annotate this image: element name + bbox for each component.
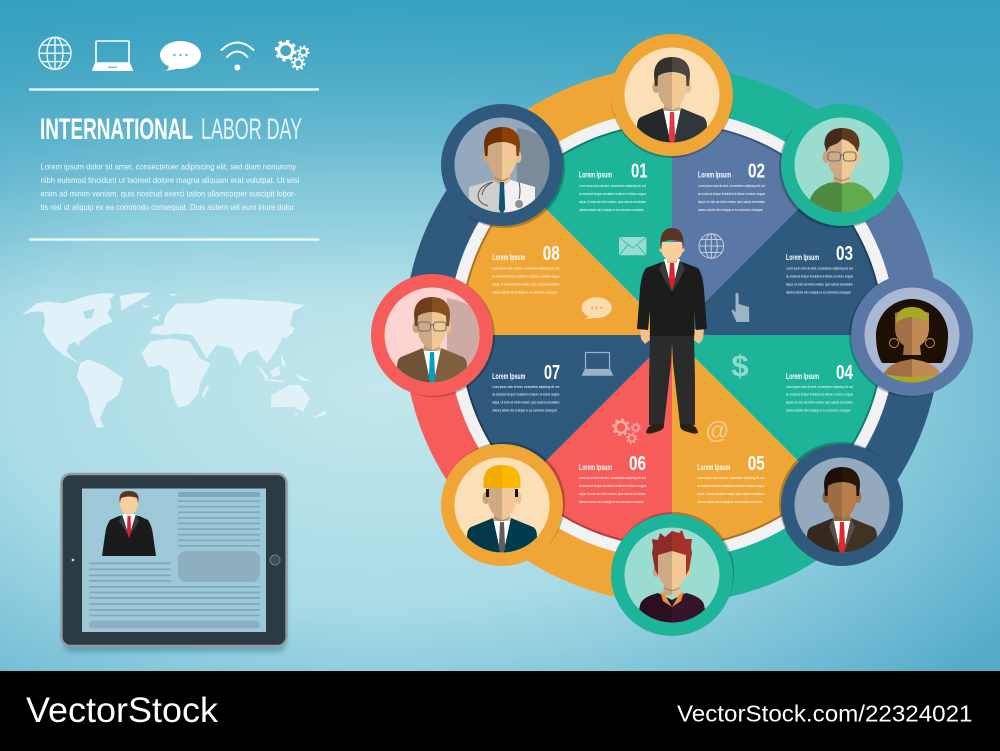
- text block 07: Lorem Ipsum: [492, 371, 526, 381]
- text block 01: ullamco laboris nisi ut aliquip ex ea commodo consequat.: [579, 208, 644, 212]
- text block 04: Lorem ipsum dolor sit amet, consectetuer adipiscing elit, sed: [786, 385, 853, 389]
- trousers: [649, 336, 695, 425]
- footer brand: VectorStock: [26, 691, 219, 730]
- jacket: [637, 262, 707, 336]
- wedge 01: [522, 123, 672, 335]
- wheel: [404, 67, 940, 603]
- pie wedges: [460, 123, 884, 547]
- icon: globe: [39, 37, 71, 69]
- shirt and tie: [659, 259, 685, 291]
- text block 01: do eiusmod tempor incididunt ut labore et dolore magna: [579, 192, 647, 196]
- avatar: construction worker: [441, 442, 565, 566]
- icon: chat bubble: [582, 297, 612, 319]
- text block 02: 02: [748, 161, 765, 183]
- avatar: woman with afro: [849, 274, 973, 397]
- text block 01: aliqua. Ut enim ad minim veniam, quis nostrud exercitation: [579, 200, 646, 204]
- text block 06: ullamco laboris nisi ut aliquip ex ea commodo consequat.: [579, 500, 644, 504]
- header icon row: [39, 37, 308, 71]
- text block 04: [786, 362, 854, 413]
- wedge 05: [672, 335, 822, 547]
- text block 07: Lorem ipsum dolor sit amet, consectetuer adipiscing elit, sed: [492, 385, 559, 389]
- text block 08: aliqua. Ut enim ad minim veniam, quis nostrud exercitation: [492, 282, 559, 286]
- white ring: [448, 111, 896, 559]
- intro paragraph: Lorem ipsum dolor sit amet, consectetuer adipiscing elit, sed diam nonummy: [40, 162, 297, 172]
- tablet person: [102, 491, 156, 556]
- intro paragraph: enim ad minim veniam, quis nostrud exerci tation ullamcorper suscipit lobor-: [40, 190, 296, 198]
- title: INTERNATIONAL: [40, 113, 193, 146]
- text block 06: Lorem ipsum dolor sit amet, consectetuer adipiscing elit, sed: [579, 476, 646, 480]
- text block 07: 07: [544, 362, 560, 384]
- intro paragraph: [40, 162, 300, 212]
- wedge 06: [522, 335, 672, 547]
- text block 07: do eiusmod tempor incididunt ut labore et dolore magna: [492, 393, 560, 397]
- icon: gears: [276, 41, 308, 69]
- text block 07: ullamco laboris nisi ut aliquip ex ea commodo consequat.: [492, 409, 557, 413]
- avatar: man with glasses and brown suit: [371, 274, 495, 397]
- text block 05: aliqua. Ut enim ad minim veniam, quis nostrud exercitation: [697, 492, 764, 496]
- text block 02: Lorem ipsum dolor sit amet, consectetuer adipiscing elit, sed: [698, 184, 765, 188]
- avatar: doctor: [441, 104, 565, 228]
- intro paragraph: tis nisl ut aliquip ex ea commodo consequat. Duis autem vel eum iriure dolor: [40, 203, 294, 212]
- text block 06: aliqua. Ut enim ad minim veniam, quis nostrud exercitation: [579, 492, 646, 496]
- text block 05: Lorem ipsum dolor sit amet, consectetuer adipiscing elit, sed: [697, 476, 764, 480]
- avatar: glasses man in green: [779, 104, 903, 228]
- text block 06: do eiusmod tempor incididunt ut labore et dolore magna: [579, 484, 647, 488]
- text block 03: ullamco laboris nisi ut aliquip ex ea commodo consequat.: [786, 290, 851, 294]
- text block 05: [697, 453, 765, 504]
- text block 02: [698, 161, 766, 212]
- icon: laptop: [92, 41, 133, 71]
- text block 05: do eiusmod tempor incididunt ut labore et dolore magna: [697, 484, 765, 488]
- text block 01: 01: [631, 161, 648, 183]
- text block 04: aliqua. Ut enim ad minim veniam, quis nostrud exercitation: [786, 401, 853, 405]
- text block 08: Lorem ipsum dolor sit amet, consectetuer adipiscing elit, sed: [492, 266, 559, 270]
- intro paragraph: nibh euismod tincidunt ut laoreet dolore magna aliquam erat volutpat. Ut wisi: [40, 176, 300, 185]
- text block 06: 06: [629, 453, 646, 475]
- text block 03: do eiusmod tempor incididunt ut labore et dolore magna: [786, 274, 854, 278]
- text block 01: Lorem ipsum dolor sit amet, consectetuer adipiscing elit, sed: [579, 184, 646, 188]
- icon: dollar: $: [731, 348, 749, 383]
- text block 03: 03: [836, 243, 853, 265]
- footer url: VectorStock.com/22324021: [677, 701, 972, 727]
- text block 02: Lorem Ipsum: [698, 170, 731, 180]
- text block 01: [579, 161, 648, 212]
- text block 07: [492, 362, 560, 413]
- shoes: [646, 424, 698, 434]
- icon: at sign: @: [705, 418, 729, 444]
- avatar: spiky red hair woman: [611, 512, 734, 636]
- central businessman: [637, 228, 707, 434]
- text block 04: Lorem Ipsum: [786, 371, 819, 381]
- glasses: [828, 152, 856, 161]
- icon: pointing hand: [732, 293, 749, 322]
- tablet: [62, 474, 286, 652]
- avatar: top businessman: [611, 34, 733, 158]
- world map: [22, 293, 327, 427]
- outer ring segments: [404, 67, 940, 603]
- title: LABOR DAY: [201, 113, 302, 146]
- tablet screen: [82, 488, 266, 632]
- text block 01: Lorem Ipsum: [579, 170, 612, 180]
- wedge 08: [460, 185, 672, 335]
- stethoscope: [478, 182, 523, 208]
- tablet home button: [270, 555, 280, 565]
- icon: envelope: [619, 237, 646, 255]
- icon: wifi: [222, 42, 254, 70]
- text block 02: ullamco laboris nisi ut aliquip ex ea commodo consequat.: [698, 208, 763, 212]
- wedge 02: [672, 123, 822, 335]
- icon: laptop small: [582, 352, 613, 376]
- icon: gears small: [613, 420, 640, 443]
- text block 04: do eiusmod tempor incididunt ut labore et dolore magna: [786, 393, 854, 397]
- text block 02: do eiusmod tempor incididunt ut labore et dolore magna: [698, 192, 766, 196]
- text block 03: [786, 243, 854, 294]
- text block 03: Lorem ipsum dolor sit amet, consectetuer adipiscing elit, sed: [786, 266, 853, 270]
- text block 08: do eiusmod tempor incididunt ut labore et dolore magna: [492, 274, 560, 278]
- text block 05: Lorem Ipsum: [697, 462, 731, 472]
- text block 08: Lorem Ipsum: [492, 252, 526, 262]
- icon: globe small: [699, 234, 724, 258]
- text block 05: 05: [748, 453, 765, 475]
- text block 02: aliqua. Ut enim ad minim veniam, quis nostrud exercitation: [698, 200, 765, 204]
- text block 07: aliqua. Ut enim ad minim veniam, quis nostrud exercitation: [492, 401, 559, 405]
- text block 04: ullamco laboris nisi ut aliquip ex ea commodo consequat.: [786, 409, 851, 413]
- tablet camera: [72, 559, 74, 561]
- text block 04: 04: [836, 362, 854, 384]
- text block 08: 08: [543, 243, 560, 265]
- wedge 04: [672, 335, 884, 485]
- icon: speech bubble: [160, 41, 201, 71]
- text block 03: Lorem Ipsum: [786, 252, 819, 262]
- text block 05: ullamco laboris nisi ut aliquip ex ea commodo consequat.: [697, 500, 762, 504]
- text block 03: aliqua. Ut enim ad minim veniam, quis nostrud exercitation: [786, 282, 853, 286]
- text block 08: ullamco laboris nisi ut aliquip ex ea commodo consequat.: [492, 290, 557, 294]
- avatar: dark skinned businessman: [779, 442, 903, 566]
- footer bar: [0, 671, 1000, 751]
- wedge 07: [460, 335, 672, 485]
- text block 06: Lorem Ipsum: [579, 462, 612, 472]
- hands: [640, 329, 704, 344]
- text block 08: [492, 243, 560, 294]
- head: [659, 228, 685, 263]
- text block 06: [579, 453, 647, 504]
- wedge 03: [672, 185, 884, 335]
